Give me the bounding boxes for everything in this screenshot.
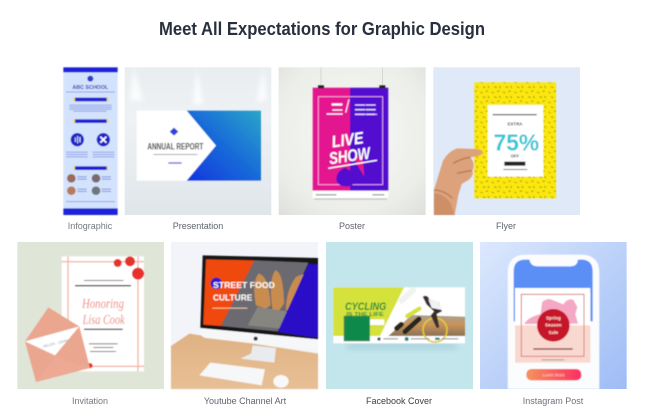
instagram thumbnail: Season [545,323,562,328]
youtube thumbnail: CULTURE [213,292,253,302]
poster thumbnail: SHOW [328,143,372,168]
label: invitation: Invitation [72,396,108,406]
label: flyer: Flyer [496,221,516,231]
youtube thumbnail: STREET FOOD [213,280,275,290]
label: facebook cover: Facebook Cover [366,396,432,406]
instagram thumbnail: Learn More [543,372,565,377]
flyer thumbnail: EXTRA [508,122,523,127]
facebook cover artwork [333,287,465,349]
label: infographic: Infographic [68,221,113,231]
invitation thumbnail: Lisa Cook [82,312,125,327]
label: presentation: Presentation [173,221,223,231]
youtube thumbnail [171,242,318,389]
label: instagram post: Instagram Post [523,396,584,406]
flyer thumbnail: 75% [494,129,539,155]
instagram thumbnail: Sale [549,330,559,335]
panel: flyer [433,67,580,231]
panel: youtube channel art [171,242,318,406]
facebook cover artwork: IS THE LIFE [346,312,384,318]
infographic thumbnail [63,67,118,215]
instagram thumbnail [480,242,627,389]
facebook background [326,242,473,389]
flyer thumbnail [433,67,580,215]
presentation thumbnail: ANNUAL REPORT [147,141,204,151]
facebook cover artwork: CYCLING [345,301,386,313]
panel: poster [279,67,426,231]
invitation thumbnail: Honoring [81,296,124,311]
invitation thumbnail [17,242,164,389]
panel: facebook cover [326,242,473,406]
presentation thumbnail [125,67,271,215]
instagram thumbnail: Spring [546,316,561,321]
icon: hand holding flyer [434,148,483,215]
panel: presentation [125,67,271,231]
label: poster: Poster [339,221,365,231]
title: Meet All Expectations for Graphic Design [159,19,485,39]
panel: infographic [63,67,118,231]
panel: instagram post [480,242,627,406]
panel: invitation [17,242,164,406]
poster thumbnail [279,67,426,215]
invitation thumbnail: HELEN · JOHN [43,339,69,349]
infographic thumbnail: ABC SCHOOL [72,85,109,91]
poster thumbnail: LIVE [330,128,365,152]
label: youtube channel art: Youtube Channel Art [204,396,287,406]
flyer thumbnail: OFF [511,153,520,158]
